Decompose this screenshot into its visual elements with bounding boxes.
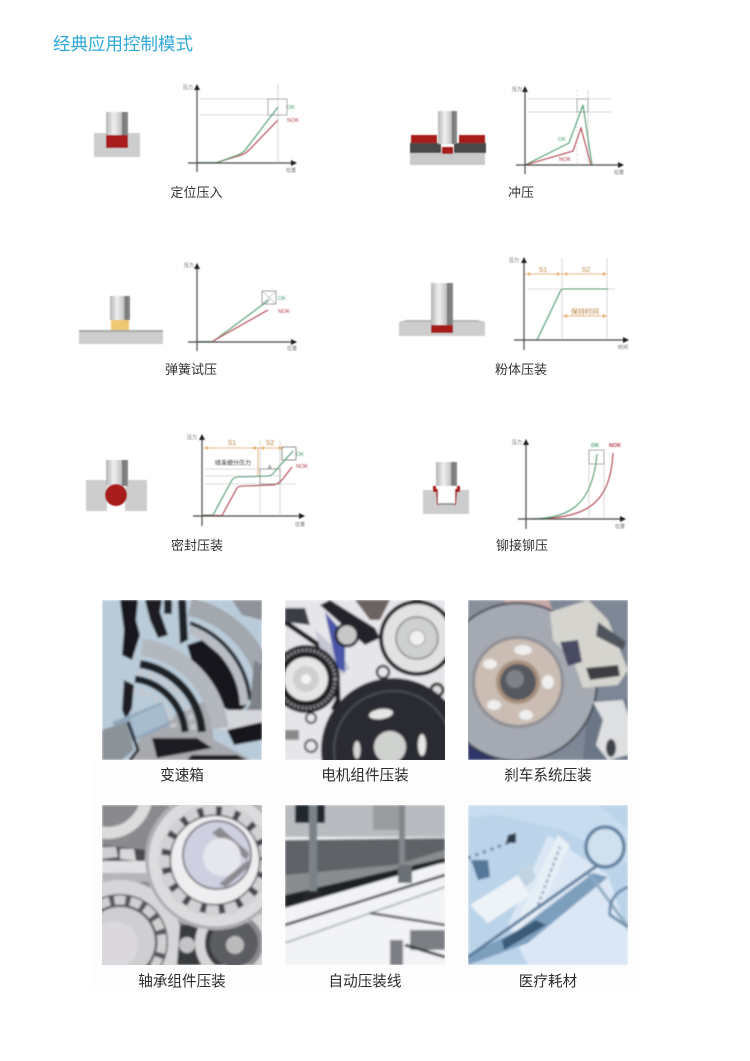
chart: position pressure curve: 压力	[183, 84, 193, 91]
chart: spring curve: NOK	[278, 309, 290, 315]
chart: seal curve: 结束细分压力	[215, 459, 251, 467]
chart: rivet curve: 压力	[512, 439, 522, 446]
photo: motor components	[285, 600, 445, 760]
chart: position pressure curve	[183, 84, 299, 174]
faint photo backdrop	[90, 760, 640, 990]
chart: seal curve: S1	[228, 440, 236, 447]
label: 医疗耗材: 医疗耗材	[519, 973, 577, 990]
chart: stamping curve: 位置	[614, 169, 624, 176]
label: 变速箱: 变速箱	[160, 767, 204, 784]
chart: seal curve: A	[268, 465, 272, 471]
chart: stamping curve: OK	[558, 137, 566, 143]
chart: powder curve: 压力	[509, 257, 519, 264]
chart: seal curve: OK	[296, 452, 304, 458]
chart: stamping curve: 压力	[512, 86, 522, 93]
panel: 密封压装	[86, 434, 308, 528]
chart: rivet curve: 位置	[615, 523, 625, 530]
label: 密封压装: 密封压装	[171, 538, 223, 553]
chart: spring curve: OK	[278, 296, 286, 302]
label: 轴承组件压装: 轴承组件压装	[138, 973, 226, 990]
label: 弹簧试压: 弹簧试压	[165, 362, 217, 377]
icon: stamping	[410, 111, 486, 165]
chart: seal curve: 压力	[187, 434, 197, 441]
panel: 弹簧试压	[79, 262, 297, 352]
chart: seal curve	[187, 434, 308, 528]
chart: powder curve: S2	[582, 267, 590, 274]
panel: 冲压	[410, 86, 624, 176]
photo: gearbox	[102, 600, 262, 760]
chart: position pressure curve: 位置	[286, 167, 296, 174]
photo: brake system	[468, 600, 628, 760]
chart: stamping curve: NOK	[559, 157, 571, 163]
chart: powder curve	[509, 257, 629, 351]
icon: press fit	[94, 112, 140, 157]
panel: 铆接铆压	[423, 439, 626, 530]
label: 自动压装线: 自动压装线	[329, 973, 402, 990]
title: 经典应用控制模式	[53, 34, 193, 54]
chart: seal curve: S2	[266, 440, 274, 447]
chart: spring curve: 压力	[184, 262, 194, 269]
chart: stamping curve	[512, 86, 624, 176]
photo: medical supplies	[468, 805, 628, 965]
panel: 粉体压装	[399, 257, 629, 351]
label: 粉体压装: 粉体压装	[495, 362, 547, 377]
icon: powder press	[399, 283, 485, 336]
label: 冲压: 冲压	[508, 185, 534, 200]
icon: rivet press	[423, 462, 469, 514]
chart: powder curve: 保持时间	[571, 307, 599, 316]
chart: rivet curve: OK	[591, 443, 599, 449]
label: 电机组件压装: 电机组件压装	[321, 767, 409, 784]
chart: spring curve	[184, 262, 297, 352]
icon: spring test	[79, 296, 163, 344]
chart: powder curve: 时间	[618, 344, 628, 351]
photo: automatic press line	[285, 805, 445, 965]
panel: 定位压入	[94, 84, 299, 174]
chart: rivet curve: NOK	[609, 443, 621, 449]
chart: spring curve: 位置	[287, 345, 297, 352]
chart: powder curve: S1	[539, 267, 547, 274]
label: 铆接铆压: 铆接铆压	[496, 538, 548, 553]
chart: rivet curve	[512, 439, 626, 530]
icon: seal press	[86, 460, 147, 511]
chart: position pressure curve: OK	[287, 105, 295, 111]
chart: seal curve: NOK	[296, 464, 308, 470]
label: 刹车系统压装: 刹车系统压装	[504, 767, 592, 784]
chart: position pressure curve: NOK	[287, 118, 299, 124]
label: 定位压入: 定位压入	[170, 185, 223, 200]
chart: seal curve: 位置	[295, 521, 305, 528]
photo: bearings	[102, 805, 262, 965]
